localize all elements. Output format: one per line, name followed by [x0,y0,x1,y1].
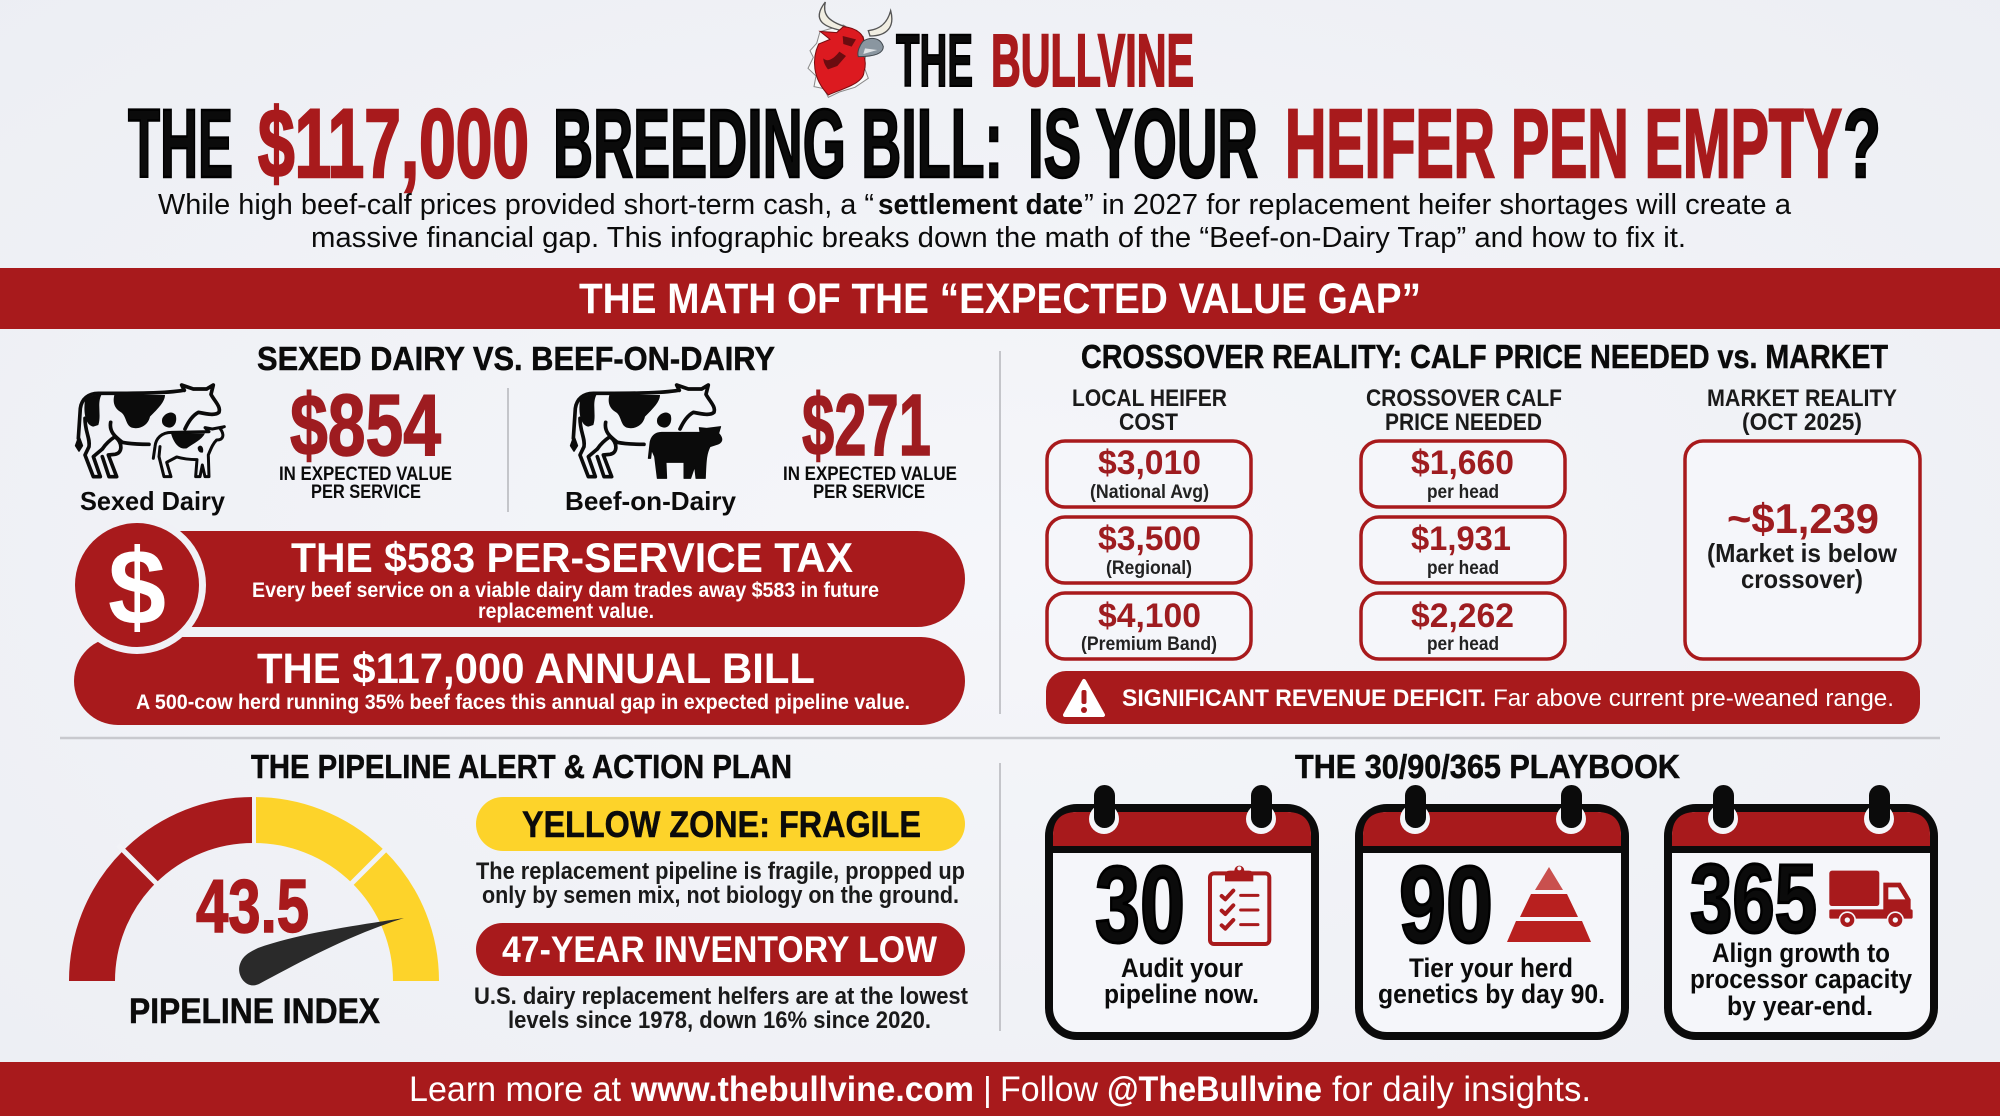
icon: dairy cow with dairy calf [76,385,224,477]
box: market reality: ~$1,239 [1727,495,1879,542]
panel: pipeline alert and action plan [92,748,968,1034]
column heading: market reality: MARKET REALITY [1707,385,1897,412]
logo wordmark [896,19,1194,102]
box: $1,660 [1361,441,1565,507]
icon: delivery truck [1829,871,1913,929]
value: beef-on-dairy $271: IN EXPECTED VALUE [783,463,957,485]
action text [1690,938,1912,1021]
panel: sexed dairy vs beef-on-dairy [68,340,965,725]
icon: dairy cow with beef calf [571,385,722,478]
action text: pipeline now. [1104,979,1259,1009]
text: yellow zone explanation: only by semen mix, not biology on the ground. [482,882,959,909]
label: beef-on-dairy: Beef-on-Dairy [565,486,737,516]
column heading: local heifer cost [1072,385,1227,436]
calendar: 365 days [1668,785,1934,1036]
title: THE [128,89,233,198]
column heading: crossover calf price needed [1366,385,1562,436]
number 365: 365 [1690,844,1817,953]
box: $2,262: $2,262 [1411,597,1514,635]
calendar: 90 days [1359,785,1625,1036]
footer banner: for daily insights. [1332,1070,1591,1109]
callout: annual bill [74,637,965,725]
number 90: 90 [1399,844,1493,966]
callout: per-service tax: replacement value. [478,600,654,623]
callout: per-service tax: Every beef service on a viable dairy dam trades away $583 in future [252,579,879,602]
heading: SEXED DAIRY VS. BEEF-ON-DAIRY [257,340,775,377]
box: $2,262 [1361,593,1565,659]
number 30: 30 [1095,844,1185,966]
box: $3,010 [1047,441,1251,507]
box: $3,500 [1047,517,1251,583]
column heading: local heifer cost: LOCAL HEIFER [1072,385,1227,412]
panel: 30/90/365 playbook [1049,748,1934,1036]
callout: annual bill: A 500-cow herd running 35% beef faces this annual gap in expected pipeline value. [136,691,910,714]
action text: genetics by day 90. [1378,979,1605,1009]
box: $4,100 [1047,593,1251,659]
box: $1,931: per head [1427,558,1499,579]
text: inventory explanation: levels since 1978, down 16% since 2020. [508,1007,931,1034]
column heading: crossover calf price needed: PRICE NEEDED [1385,409,1542,436]
action text: Tier your herd [1409,953,1573,983]
text: yellow zone explanation: The replacement pipeline is fragile, propped up [476,858,965,885]
section banner: the math of the expected value gap [0,268,2000,329]
logo wordmark: BULLVINE [991,19,1194,102]
column heading: local heifer cost: COST [1119,409,1178,436]
box: $1,660: $1,660 [1411,444,1514,482]
section banner: the math of the expected value gap: THE MATH OF THE “EXPECTED VALUE GAP” [579,275,1421,323]
footer banner: www.thebullvine.com [630,1070,974,1109]
title [128,89,1881,198]
alert bar: significant revenue deficit: SIGNIFICANT REVENUE DEFICIT. [1122,685,1486,712]
calendar: 30 days [1049,785,1315,1036]
box: $3,500: (Regional) [1106,558,1192,579]
footer banner [0,1062,2000,1116]
callout: per-service tax: THE $583 PER-SERVICE TAX [291,534,853,581]
alert bar: significant revenue deficit: Far above current pre-weaned range. [1493,685,1894,712]
value: sexed dairy $854: PER SERVICE [311,481,421,503]
subtitle: While high beef-calf prices provided short-term cash, a “ [158,189,874,221]
alert bar: significant revenue deficit [1046,671,1920,724]
subtitle [158,189,1792,254]
text: inventory explanation: U.S. dairy replacement helfers are at the lowest [474,983,968,1010]
icon: clipboard checklist [1210,866,1269,944]
box: $4,100: (Premium Band) [1081,634,1217,655]
action text: by year-end. [1727,991,1873,1021]
icon: warning triangle [1065,681,1103,715]
value: sexed dairy $854: $854 [290,377,441,474]
box: $3,010: $3,010 [1098,444,1201,482]
gauge: pipeline index [92,790,416,1031]
text: inventory explanation [474,983,968,1034]
heading: THE 30/90/365 PLAYBOOK [1295,748,1680,785]
gauge value: 43.5 [196,864,309,948]
action text: processor capacity [1690,964,1912,994]
column heading: market reality [1707,385,1897,436]
label: sexed dairy: Sexed Dairy [80,486,226,516]
icon: tiered pyramid [1507,867,1591,942]
icon: dollar coin [68,516,206,654]
text: yellow zone explanation [476,858,965,909]
value: beef-on-dairy $271 [783,377,957,503]
logo: The Bullvine bull head [808,2,892,97]
logo wordmark: THE [896,19,973,102]
box: $3,500: $3,500 [1098,520,1201,558]
value: beef-on-dairy $271: $271 [802,377,931,474]
title: IS YOUR [1028,89,1258,198]
subtitle: ” in 2027 for replacement heifer shortages will create a [1084,189,1792,221]
box: $4,100: $4,100 [1098,597,1201,635]
action text [1104,953,1259,1009]
title: BREEDING BILL: [553,89,1003,198]
subtitle: settlement date [878,189,1083,221]
heading: THE PIPELINE ALERT & ACTION PLAN [251,748,792,785]
gauge label: PIPELINE INDEX [129,992,381,1031]
footer banner: @TheBullvine [1107,1070,1322,1109]
footer banner: Follow [1000,1070,1099,1109]
panel: crossover reality [1046,338,1920,724]
box: market reality: crossover) [1741,564,1863,594]
footer banner: | [983,1071,992,1109]
footer banner: Learn more at [409,1070,621,1109]
value: sexed dairy $854 [279,377,452,503]
box: market reality: (Market is below [1707,538,1898,568]
callout: per-service tax [130,531,965,627]
status pill: yellow zone [476,797,965,851]
box: $1,931 [1361,517,1565,583]
gauge needle [239,918,404,985]
icon: dollar coin: $ [108,526,166,647]
action text: Align growth to [1712,938,1890,968]
status pill: yellow zone: YELLOW ZONE: FRAGILE [522,804,921,845]
value: beef-on-dairy $271: PER SERVICE [813,481,925,503]
box: $2,262: per head [1427,634,1499,655]
column heading: crossover calf price needed: CROSSOVER CALF [1366,385,1562,412]
heading: CROSSOVER REALITY: CALF PRICE NEEDED vs. MARKET [1081,338,1888,375]
subtitle: massive financial gap. This infographic breaks down the math of the “Beef-on-Dairy Trap” and how to fix it. [311,222,1686,254]
status pill: inventory low: 47-YEAR INVENTORY LOW [502,929,937,970]
action text: Audit your [1121,953,1243,983]
action text [1378,953,1605,1009]
title: $117,000 [258,89,529,198]
column heading: market reality: (OCT 2025) [1742,409,1862,436]
box: $3,010: (National Avg) [1090,482,1209,503]
title: ? [1843,89,1881,198]
box: market reality [1685,441,1920,659]
box: $1,931: $1,931 [1411,520,1511,558]
callout: annual bill: THE $117,000 ANNUAL BILL [257,645,815,693]
box: $1,660: per head [1427,482,1499,503]
value: sexed dairy $854: IN EXPECTED VALUE [279,463,452,485]
